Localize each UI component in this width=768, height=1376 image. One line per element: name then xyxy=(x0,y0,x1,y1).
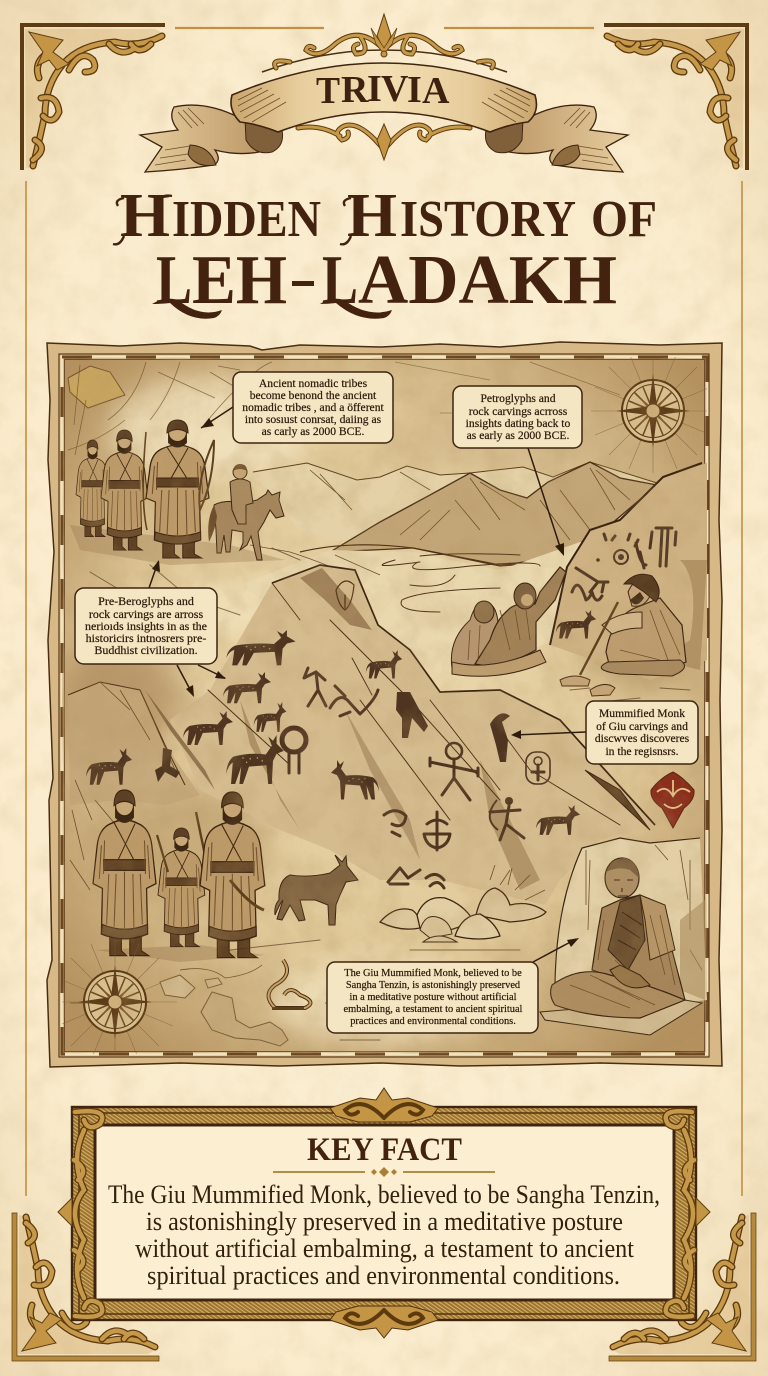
river valley xyxy=(240,535,600,672)
title line 2: L xyxy=(322,242,358,319)
ribbon text: R xyxy=(341,69,369,111)
ribbon ornament: top flourish xyxy=(262,14,507,72)
callout: Giu Mummified Monk: practices and environmental conditions. xyxy=(350,1016,516,1027)
title line 2: ADAKH xyxy=(358,242,617,319)
footprints and ground marks xyxy=(90,548,690,1040)
callout: petroglyphs: insights dating back to xyxy=(466,417,571,430)
key fact ornate frame xyxy=(58,1088,710,1338)
mountains xyxy=(253,462,657,566)
map terrain and scene xyxy=(53,349,715,1064)
callout: mummified monk carvings: discwves discoveres xyxy=(595,732,690,745)
key fact divider xyxy=(273,1167,495,1177)
callout: mummified monk carvings: of Giu carvings and xyxy=(596,720,688,733)
title line 1: OF xyxy=(591,191,657,248)
callout: nomadic tribes: nomadic tribes , and a öfferent xyxy=(242,401,384,414)
title line 1 xyxy=(113,182,657,250)
callout: mummified monk carvings xyxy=(511,701,698,764)
ribbon tails xyxy=(140,105,628,172)
callout: mummified monk carvings: Mummified Monk xyxy=(599,707,685,720)
title line 1: ISTORY xyxy=(400,191,576,248)
central rock face with shading xyxy=(145,565,655,905)
land patches xyxy=(70,964,326,1046)
boulders xyxy=(380,865,546,942)
old map lines and land patch xyxy=(68,362,620,455)
seated figures group xyxy=(451,567,686,696)
panel: key fact xyxy=(58,1088,710,1338)
callout: Giu Mummified Monk: The Giu Mummified Monk, believed to be xyxy=(344,968,522,979)
callout: pre-Buddhist civilization: nerioıds insights in as the xyxy=(85,619,207,633)
crest emblem xyxy=(651,772,694,828)
callout: nomadic tribes: become benond the ancient xyxy=(250,389,377,402)
map parchment sheet xyxy=(47,342,722,1067)
callout: Giu Mummified Monk xyxy=(327,938,579,1033)
panel: parchment map xyxy=(47,342,722,1067)
ribbon main band xyxy=(231,63,536,153)
large antelope carving xyxy=(275,855,358,925)
title line 1: IDDEN xyxy=(172,191,321,248)
map grain xyxy=(62,357,707,1054)
monk alcove xyxy=(555,838,707,1010)
key fact text line 2: is astonishingly preserved in a meditative posture xyxy=(146,1207,623,1236)
petroglyph carvings xyxy=(86,630,580,888)
title line 1: H xyxy=(347,182,397,250)
ribbon text: T xyxy=(316,70,340,112)
horse and young rider xyxy=(208,464,284,560)
left rock xyxy=(68,682,200,890)
callout: Giu Mummified Monk: in a meditative posture without artificial xyxy=(349,992,517,1003)
callout: nomadic tribes: as carly as 2000 BCE. xyxy=(262,425,364,438)
callout: nomadic tribes xyxy=(201,372,393,443)
callout: petroglyphs: rock carvings acrross xyxy=(469,405,568,418)
title line 1: H xyxy=(120,182,170,250)
callout: nomadic tribes: Ancient nomadic tribes xyxy=(259,377,368,390)
callout: pre-Buddhist civilization: Buddhist civilization. xyxy=(94,643,198,657)
callout: nomadic tribes: into sosıust conrsat, daiing as xyxy=(245,413,382,426)
ribbon ornament: bottom flourish xyxy=(298,124,470,160)
callout: pre-Buddhist civilization: Pre-Beroglyphs and xyxy=(98,594,194,608)
right carved rock xyxy=(550,463,707,680)
mummified monk xyxy=(540,858,702,1035)
key fact heading: KEY FACT xyxy=(307,1132,462,1168)
ribbon text: V xyxy=(381,68,409,110)
callout: mummified monk carvings: in the regisnsrs. xyxy=(605,745,679,758)
callout: Giu Mummified Monk: Sangha Tenzin, is astonishingly preserved xyxy=(346,980,521,991)
key fact text: The Giu Mummified Monk, believed to be Sangha Tenzin, xyxy=(108,1180,660,1209)
key fact text line 3: without artificial embalming, a testament to ancient xyxy=(135,1234,635,1263)
tone patches xyxy=(60,380,700,1040)
title line 2: EH xyxy=(192,242,287,319)
callout: petroglyphs: as early as 2000 BCE. xyxy=(467,429,569,442)
key fact text line 4: spiritual practices and environmental conditions. xyxy=(147,1261,620,1290)
lower tribal figures xyxy=(93,790,265,962)
callout: pre-Buddhist civilization: rock carvings are arross xyxy=(89,607,203,621)
callout: Giu Mummified Monk: embalming, a testament to ancient spiritual xyxy=(344,1004,523,1015)
title line 2: L xyxy=(156,242,192,319)
scroll ornament xyxy=(268,960,310,1010)
title line 2 xyxy=(152,242,617,319)
compass: bottom left xyxy=(62,940,177,1054)
map inner frame xyxy=(59,354,709,1057)
trivia ribbon banner xyxy=(140,14,628,172)
callout: petroglyphs xyxy=(453,386,582,556)
nomad tribes group xyxy=(70,420,285,565)
ribbon text: I xyxy=(367,68,382,110)
callout: pre-Buddhist civilization xyxy=(75,560,226,697)
ribbon text: I xyxy=(407,69,422,111)
callout: petroglyphs: Petroglyphs and xyxy=(480,392,556,405)
main title xyxy=(113,182,657,319)
compass: top right xyxy=(591,357,707,473)
callout: pre-Buddhist civilization: historicirs intnosrers pre- xyxy=(86,631,206,645)
ribbon text: A xyxy=(422,70,450,112)
